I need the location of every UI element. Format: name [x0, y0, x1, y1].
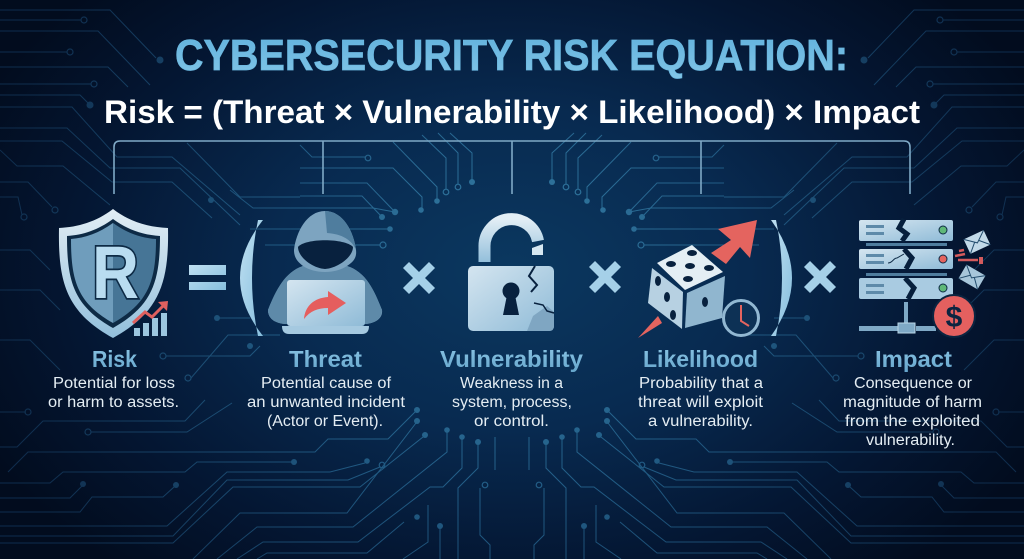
description: Impact: [843, 375, 982, 449]
icon: hooded hacker with laptop: [268, 211, 382, 334]
panel: impact: [843, 219, 990, 449]
description: Threat: Potential cause of: [261, 375, 392, 392]
symbol: multiply 1: [406, 265, 432, 291]
symbol: open parenthesis: [240, 220, 263, 336]
label: Likelihood: Likelihood: [643, 346, 758, 372]
icon: shield with R and rising chart: R: [92, 231, 139, 314]
description: Impact: from the exploited: [845, 413, 980, 430]
description: Likelihood: a vulnerability.: [648, 413, 753, 430]
symbol: multiply 3: [807, 264, 833, 290]
description: Vulnerability: Weakness in a: [460, 375, 563, 392]
icon: cracked server with envelopes and dollar badge: $: [946, 301, 963, 334]
symbol: multiply 2: [592, 264, 618, 290]
icon: dice with rising arrow and clock: [638, 220, 758, 338]
symbol: equals: [189, 265, 226, 290]
description: Risk: [48, 375, 179, 411]
icon: broken padlock: [468, 219, 554, 331]
label: Impact: Impact: [875, 346, 952, 372]
description: Vulnerability: [452, 375, 572, 430]
description: Threat: [247, 375, 406, 430]
description: Likelihood: Probability that a: [639, 375, 763, 392]
description: Impact: Consequence or: [854, 375, 972, 392]
description: Vulnerability: system, process,: [452, 394, 572, 411]
panel: vulnerability: [440, 219, 583, 430]
panel: threat: [247, 211, 406, 430]
description: Risk: Potential for loss: [53, 375, 175, 392]
description: Vulnerability: or control.: [474, 413, 549, 430]
description: Risk: or harm to assets.: [48, 394, 179, 411]
description: Impact: magnitude of harm: [843, 394, 982, 411]
label: Vulnerability: Vulnerability: [440, 346, 583, 372]
label: Risk: Risk: [92, 346, 137, 372]
icon: cracked server with envelopes and dollar badge: [859, 219, 990, 337]
description: Impact: vulnerability.: [866, 432, 955, 449]
description: Likelihood: threat will exploit: [638, 394, 764, 411]
description: Threat: an unwanted incident: [247, 394, 406, 411]
description: Threat: (Actor or Event).: [267, 413, 383, 430]
panel: likelihood: [638, 220, 764, 430]
title: CYBERSECURITY RISK EQUATION:: [175, 31, 848, 80]
panel: risk: [48, 209, 179, 411]
icon: shield with R and rising chart: [59, 209, 168, 338]
symbol: close parenthesis: [771, 220, 792, 336]
description: Likelihood: [638, 375, 764, 430]
bracket connecting equation to terms: [114, 141, 910, 194]
equation subtitle: Risk = (Threat × Vulnerability × Likelihood) × Impact: [104, 94, 920, 130]
label: Threat: Threat: [289, 346, 362, 372]
